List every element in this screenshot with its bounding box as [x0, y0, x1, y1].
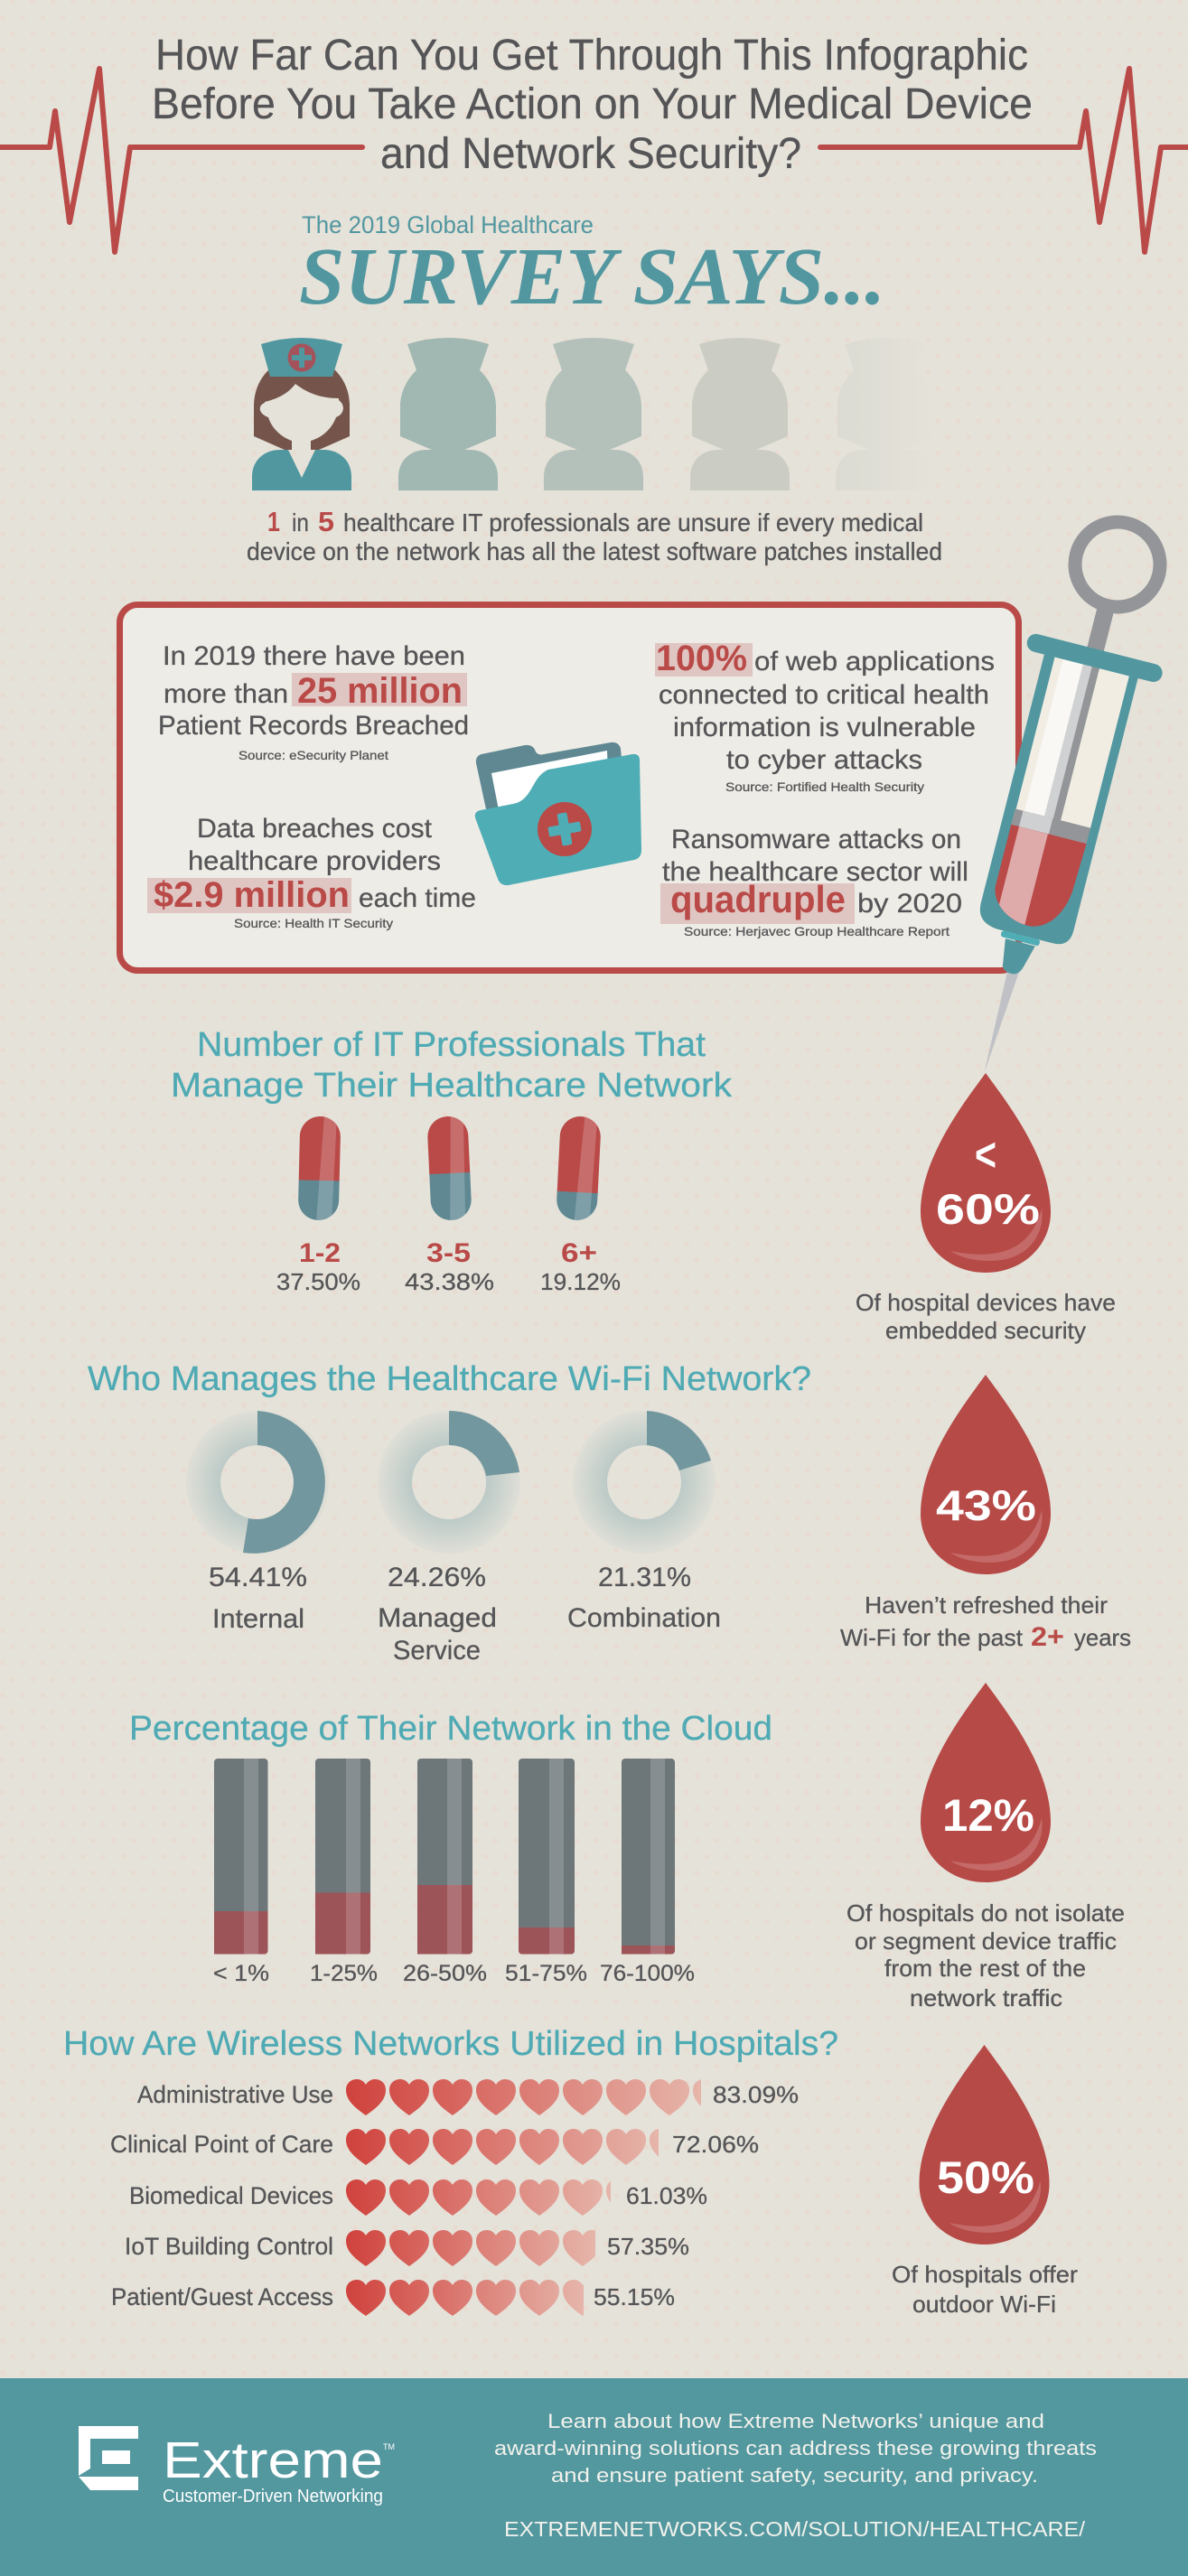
- donut: managed service 24.26%: 24.26%: [388, 1563, 486, 1592]
- chart: capsule 6+: 6+: [561, 1238, 597, 1268]
- text: call to action: EXTREMENETWORKS.COM/SOLUTION/HEALTHCARE/: [504, 2517, 1086, 2541]
- stat: 2.9 million cost: [147, 814, 476, 930]
- title: Before You Take Action on Your Medical Device: [152, 80, 1033, 128]
- heading: number of IT professionals: [171, 1026, 733, 1105]
- chart: capsule 1-2: [276, 1115, 360, 1295]
- stat: 100 percent web applications: of web applications: [754, 647, 995, 677]
- stat: ransomware quadruple: quadruple: [670, 878, 846, 920]
- flange: [1025, 632, 1165, 684]
- heart row: clinical point of care: [110, 2129, 759, 2166]
- bar: 1-25%: [310, 1759, 378, 1986]
- donut: combination 21.31%: 21.31%: [598, 1563, 691, 1592]
- bar: under 1%: [213, 1759, 269, 1986]
- heading: network in the cloud: Percentage of Their Network in the Cloud: [129, 1710, 772, 1748]
- text: 1 in 5 statistic: healthcare IT professionals are unsure if every medical: [343, 509, 923, 537]
- callout: 43% wi-fi: Wi-Fi for the past: [840, 1624, 1024, 1651]
- heart row: clinical point of care: 72.06%: [672, 2131, 759, 2158]
- icon: medical folder: [475, 742, 641, 885]
- bar: 51-75%: 51-75%: [505, 1961, 587, 1986]
- stat: 2.9 million cost: healthcare providers: [188, 846, 441, 876]
- logo: Extreme Networks: TM: [383, 2442, 395, 2451]
- heart row: biomedical devices: 61.03%: [626, 2182, 707, 2209]
- donut: combination 21.31%: [567, 1411, 721, 1633]
- bar: 1-25%: 1-25%: [310, 1961, 378, 1986]
- callout: under 60% devices: Of hospital devices have: [856, 1289, 1116, 1316]
- donut: internal 54.41%: [186, 1411, 329, 1634]
- donut: combination 21.31%: Combination: [567, 1603, 721, 1633]
- text: call to action: and ensure patient safety, security, and privacy.: [551, 2464, 1038, 2487]
- callout: 12% isolate: 12%: [942, 1790, 1034, 1841]
- text: 1 in 5 statistic: in: [292, 509, 309, 537]
- stat: 2.9 million cost: $2.9 million: [154, 875, 350, 915]
- stat: 25 million records: more than: [164, 679, 288, 709]
- stat: 100 percent web applications: 100%: [656, 639, 747, 678]
- donut: internal 54.41%: Internal: [212, 1604, 304, 1634]
- callout: 43% wi-fi: [840, 1375, 1131, 1652]
- heart row: administrative use: 83.09%: [713, 2081, 799, 2108]
- panel: breach statistics: [119, 605, 1019, 970]
- icon: nurse: [252, 338, 351, 490]
- heart row: patient guest access: [111, 2280, 675, 2317]
- heart row: administrative use: Administrative Use: [137, 2081, 333, 2108]
- nozzle: [997, 938, 1035, 977]
- heart row: iot building control: [125, 2230, 689, 2267]
- stat: 100 percent web applications: [655, 639, 995, 794]
- heart row: iot building control: 57.35%: [607, 2233, 689, 2260]
- callout: 43% wi-fi: 43%: [936, 1481, 1036, 1529]
- title: How Far Can You Get Through This Infographic: [155, 32, 1028, 79]
- heart row: biomedical devices: [129, 2179, 707, 2217]
- stat: 2.9 million cost: Data breaches cost: [197, 814, 433, 844]
- stat: ransomware quadruple: the healthcare sector will: [662, 857, 968, 887]
- heart row: patient guest access: Patient/Guest Access: [111, 2283, 333, 2310]
- callout: under 60% devices: [856, 1073, 1116, 1344]
- text: 1 in 5 statistic: 1: [267, 506, 280, 537]
- logo: Extreme Networks: [79, 2426, 395, 2506]
- bar: under 1%: < 1%: [213, 1961, 269, 1986]
- callout: 50% outdoor wi-fi: [892, 2045, 1078, 2318]
- stat: 2.9 million cost: Source: Health IT Security: [234, 916, 393, 930]
- icon: syringe: [979, 515, 1167, 1072]
- text: call to action: Learn about how Extreme Networks’ unique and: [547, 2410, 1044, 2432]
- stat: 25 million records: Patient Records Breached: [158, 711, 469, 741]
- text: 1 in 5 statistic: device on the network has all the latest software patches installed: [247, 537, 942, 565]
- callout: 50% outdoor wi-fi: 50%: [937, 2152, 1034, 2203]
- barrel: [976, 649, 1139, 947]
- chart: capsule 3-5: 43.38%: [405, 1268, 494, 1295]
- heartbeat line left: [0, 69, 362, 252]
- text: call to action: award-winning solutions can address these growing threats: [494, 2437, 1097, 2459]
- chart: capsule 3-5: [405, 1115, 494, 1295]
- donut: managed service 24.26%: Service: [393, 1636, 481, 1666]
- stat: ransomware quadruple: Ransomware attacks on: [671, 825, 961, 854]
- donut: managed service 24.26%: Managed: [378, 1603, 497, 1633]
- heading: number of IT professionals: Number of IT Professionals That: [197, 1026, 706, 1064]
- chart: capsule 1-2: 37.50%: [276, 1268, 360, 1295]
- callout: 43% wi-fi: Haven’t refreshed their: [865, 1591, 1108, 1619]
- heart row: administrative use: [137, 2079, 799, 2116]
- callout: 12% isolate: [847, 1683, 1125, 2011]
- callout: 12% isolate: or segment device traffic: [855, 1927, 1117, 1955]
- callout: under 60% devices: 60%: [936, 1185, 1040, 1233]
- stat: 100 percent web applications: to cyber attacks: [726, 745, 922, 775]
- bar: 76-100%: [600, 1759, 695, 1986]
- callout: 12% isolate: network traffic: [910, 1984, 1062, 2011]
- survey subtitle: The 2019 Global Healthcare: [302, 211, 594, 238]
- callout: 50% outdoor wi-fi: Of hospitals offer: [892, 2261, 1078, 2288]
- bar: 26-50%: [403, 1759, 487, 1986]
- plunger ring: [1066, 513, 1169, 616]
- bar: 76-100%: 76-100%: [600, 1961, 695, 1986]
- donut: managed service 24.26%: [378, 1411, 520, 1666]
- stat: ransomware quadruple: [660, 825, 968, 938]
- icon: faded nurse 5: [836, 338, 935, 490]
- stat: 25 million records: [158, 641, 469, 762]
- callout: 12% isolate: Of hospitals do not isolate: [847, 1899, 1125, 1927]
- heartbeat line right: [820, 69, 1188, 252]
- stat: 25 million records: Source: eSecurity Planet: [239, 748, 388, 762]
- plunger rod: [1082, 602, 1116, 672]
- text: 1 in 5 statistic: 5: [318, 506, 334, 537]
- heart row: patient guest access: 55.15%: [594, 2283, 675, 2310]
- callout: 43% wi-fi: years: [1074, 1624, 1131, 1651]
- callout: 12% isolate: from the rest of the: [884, 1955, 1086, 1982]
- title: [152, 32, 1033, 178]
- heart row: biomedical devices: Biomedical Devices: [129, 2182, 333, 2209]
- stat: 25 million records: In 2019 there have been: [163, 641, 465, 671]
- stat: ransomware quadruple: Source: Herjavec Group Healthcare Report: [684, 924, 949, 938]
- callout: 50% outdoor wi-fi: outdoor Wi-Fi: [912, 2291, 1056, 2318]
- text: call to action: [494, 2410, 1097, 2541]
- logo: Extreme Networks: Extreme: [163, 2431, 383, 2489]
- heading: wireless networks: How Are Wireless Networks Utilized in Hospitals?: [63, 2025, 838, 2063]
- logo: Extreme Networks: Customer-Driven Networking: [163, 2487, 383, 2506]
- panel: footer: [0, 2378, 1188, 2576]
- bar: 26-50%: 26-50%: [403, 1961, 487, 1986]
- callout: under 60% devices: embedded security: [885, 1317, 1086, 1344]
- heading: number of IT professionals: Manage Their Healthcare Network: [171, 1067, 733, 1105]
- heart row: iot building control: IoT Building Control: [125, 2233, 333, 2260]
- survey says heading: SURVEY SAYS...: [299, 232, 885, 322]
- stat: ransomware quadruple: by 2020: [857, 889, 962, 919]
- icon: faded nurse 3: [544, 338, 643, 490]
- text: 1 in 5 statistic: [247, 506, 942, 565]
- bar: 51-75%: [505, 1759, 587, 1986]
- stat: 100 percent web applications: connected to critical health: [659, 680, 989, 710]
- icon: faded nurse 4: [690, 338, 790, 490]
- heart row: clinical point of care: Clinical Point of Care: [110, 2131, 333, 2158]
- stat: 2.9 million cost: each time: [359, 883, 476, 913]
- chart: capsule 1-2: 1-2: [299, 1238, 341, 1268]
- stat: 25 million records: 25 million: [297, 671, 463, 711]
- donut: internal 54.41%: 54.41%: [209, 1563, 307, 1592]
- needle: [981, 967, 1020, 1075]
- chart: capsule 3-5: 3-5: [426, 1238, 471, 1268]
- stat: 100 percent web applications: information is vulnerable: [673, 713, 976, 742]
- icon: faded nurse 2: [398, 338, 498, 490]
- callout: under 60% devices: <: [975, 1129, 996, 1181]
- title: and Network Security?: [380, 130, 801, 178]
- callout: 43% wi-fi: 2+: [1031, 1622, 1064, 1652]
- heading: who manages wi-fi: Who Manages the Healthcare Wi-Fi Network?: [88, 1360, 811, 1398]
- stat: 100 percent web applications: Source: Fortified Health Security: [725, 779, 924, 794]
- chart: capsule 6+: 19.12%: [540, 1268, 621, 1295]
- chart: capsule 6+: [540, 1115, 621, 1295]
